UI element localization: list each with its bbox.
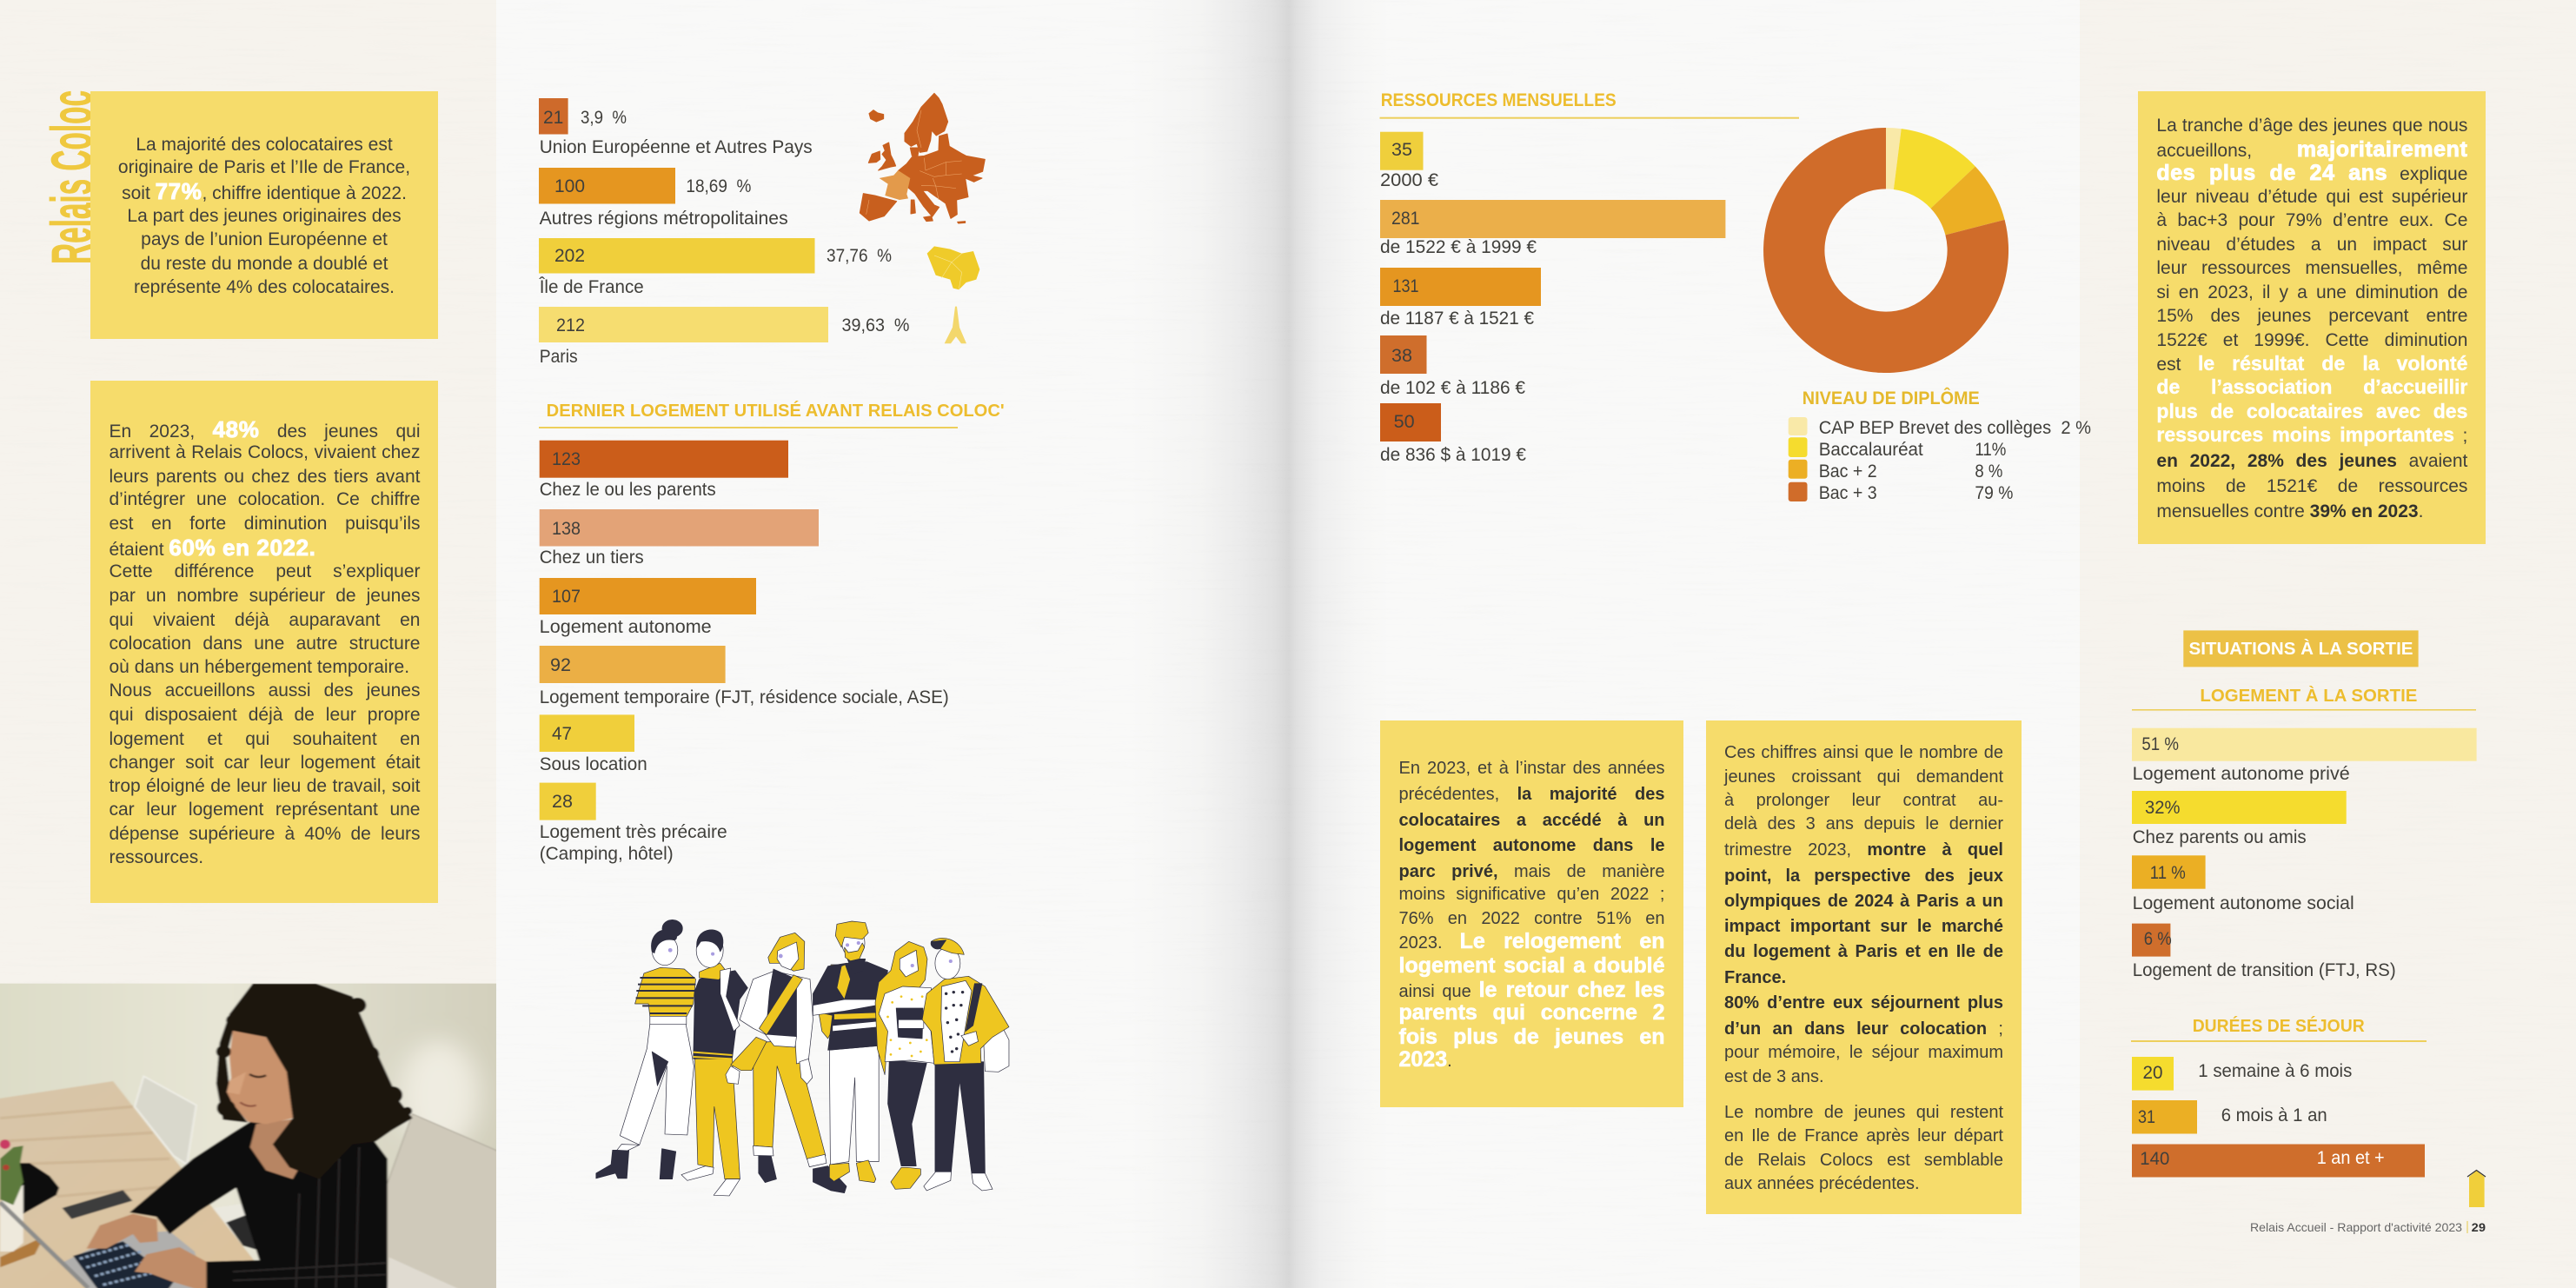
text box: logement avant l'arrivée: par un nombre supérieur de jeunes	[110, 586, 421, 606]
bar: 1 semaine à 6 mois: 20	[2143, 1063, 2162, 1083]
text box: origine des colocataires: soit 77%, chiffre identique à 2022.	[122, 178, 407, 204]
bar: logement autonome: Logement autonome	[540, 617, 712, 637]
text box: logement avant l'arrivée: est en forte diminution puisqu’ils	[110, 514, 421, 534]
badge: situations à la sortie: SITUATIONS À LA SORTIE	[2188, 639, 2413, 659]
chart: dernier logement	[540, 441, 949, 864]
legend: niveau de diplôme	[1789, 417, 2091, 503]
text box: prolongation et jeux olympiques: jeunes croissant qui demandent	[1724, 767, 2003, 787]
text box: âge, études et ressources: des plus de 24 ans explique	[2156, 161, 2467, 185]
bar: logement temporaire	[540, 646, 949, 707]
legend: niveau de diplôme: 8 %	[1975, 461, 2002, 481]
text box: accès au logement autonome: fois plus de jeunes en	[1399, 1025, 1665, 1049]
text box: origine des colocataires: du reste du monde a doublé et	[141, 254, 388, 274]
text box: logement avant l'arrivée: arrivent à Relais Colocs, vivaient chez	[110, 442, 421, 462]
heading: durées de séjour: DURÉES DE SÉJOUR	[2193, 1016, 2365, 1036]
text box: accès au logement autonome: En 2023, et à l’instar des années	[1399, 759, 1665, 778]
bar: tiers	[540, 509, 819, 568]
person 4	[813, 921, 888, 1183]
text box: logement avant l'arrivée: Cette différence peut s’expliquer	[110, 561, 421, 581]
bar: 836 à 1019: de 836 $ à 1019 €	[1380, 445, 1526, 465]
text box: logement avant l'arrivée: changer soit car leur logement était	[110, 753, 421, 773]
text box: âge, études et ressources: à bac+3 pour 79% d’entre eux. Ce	[2156, 210, 2467, 230]
segment: CAP BEP 2%	[1886, 128, 1902, 189]
text box: âge, études et ressources: leur niveau d’étude qui est supérieur	[2156, 187, 2467, 207]
bar: Union Européenne: 21	[543, 108, 563, 128]
bar: logement autonome social: 11 %	[2150, 863, 2186, 883]
bar: tiers: 138	[552, 519, 581, 539]
bar: logement de transition	[2132, 924, 2396, 980]
icon: map of Europe	[860, 93, 985, 223]
bar: 1 an et plus: 140	[2140, 1149, 2169, 1169]
badge: situations à la sortie	[2183, 630, 2419, 667]
heading: dernier logement: DERNIER LOGEMENT UTILISÉ AVANT RELAIS COLOC'	[547, 401, 1005, 421]
text box: logement avant l'arrivée: qui vivaient déjà auparavant en	[110, 610, 421, 630]
text box: logement avant l'arrivée: En 2023, 48% des jeunes qui	[110, 416, 421, 442]
bar: 1 an et plus	[2132, 1144, 2425, 1177]
text box: prolongation et jeux olympiques: de Relais Colocs est semblable	[1724, 1151, 2003, 1170]
text box: âge, études et ressources: accueillons, majoritairement	[2156, 137, 2467, 162]
bar: logement temporaire: Logement temporaire (FJT, résidence sociale, ASE)	[540, 687, 949, 707]
text box: logement avant l'arrivée	[90, 381, 438, 903]
bar: logement autonome privé	[2132, 728, 2477, 784]
text box: prolongation et jeux olympiques: delà des 3 ans depuis le dernier	[1724, 814, 2003, 833]
text box: logement avant l'arrivée: Nous accueillons aussi des jeunes	[110, 681, 421, 700]
text box: logement avant l'arrivée: colocation dans une autre structure	[110, 634, 421, 654]
text box: origine des colocataires: originaire de Paris et l’Ile de France,	[118, 157, 410, 177]
bar: Île de France: 37,76 %	[827, 246, 892, 266]
text box: prolongation et jeux olympiques: point, la perspective des jeux	[1724, 866, 2003, 885]
bar: chez parents ou amis: Chez parents ou amis	[2133, 827, 2307, 847]
bar: 1187 à 1521	[1380, 268, 1541, 329]
segment: Bac + 3 79%	[1763, 128, 2008, 373]
heading: logement à la sortie: LOGEMENT À LA SORTIE	[2200, 686, 2417, 706]
bar: parents	[540, 441, 788, 500]
bar: 1522 à 1999: 281	[1391, 209, 1420, 229]
text box: accès au logement autonome: 2023.	[1399, 1047, 1452, 1072]
text box: logement avant l'arrivée: où dans un hébergement temporaire.	[110, 657, 409, 677]
bar: Île de France: 202	[554, 246, 585, 266]
text box: prolongation et jeux olympiques: en Ile de France après leur départ	[1724, 1126, 2003, 1145]
bar: logement temporaire: 92	[550, 655, 571, 675]
text box: prolongation et jeux olympiques: à prolonger leur contrat au-	[1724, 791, 2003, 810]
photo: young woman typing on a laptop	[0, 979, 506, 1288]
bar: Union Européenne: 3,9 %	[581, 108, 627, 128]
bar: Paris: Paris	[540, 347, 578, 367]
legend: niveau de diplôme: Bac + 3	[1819, 483, 1877, 503]
text box: logement avant l'arrivée: ressources.	[110, 847, 203, 867]
text box: accès au logement autonome	[1380, 720, 1683, 1107]
legend: niveau de diplôme: CAP BEP Brevet des collèges 2 %	[1819, 418, 2091, 438]
bar: 6 mois à 1 an: 31	[2138, 1107, 2155, 1127]
text box: accès au logement autonome: logement social a doublé	[1399, 953, 1665, 978]
person 2	[681, 930, 747, 1196]
bar: sous location: 47	[552, 724, 572, 744]
text box: prolongation et jeux olympiques: pour mémoire, le séjour maximum	[1724, 1043, 2003, 1062]
text box: accès au logement autonome: colocataires a accédé à un	[1399, 810, 1665, 829]
text box: âge, études et ressources: mensuelles contre 39% en 2023.	[2156, 501, 2423, 521]
bar: chez parents ou amis	[2132, 791, 2347, 847]
bar: 102 à 1186: de 102 € à 1186 €	[1380, 378, 1525, 398]
text box: logement avant l'arrivée: dépense supérieure à 40% de leurs	[110, 824, 421, 844]
bar: 102 à 1186	[1380, 335, 1525, 398]
legend: niveau de diplôme: Bac + 2	[1819, 461, 1877, 481]
legend: niveau de diplôme: 79 %	[1975, 483, 2013, 503]
bar: 6 mois à 1 an: 6 mois à 1 an	[2221, 1105, 2327, 1125]
text box: âge, études et ressources: ressources moins importantes ;	[2156, 423, 2467, 446]
text box: origine des colocataires: pays de l’union Européenne et	[141, 229, 388, 249]
segment: Baccalauréat 11%	[1894, 129, 1975, 209]
text box: âge, études et ressources: est le résultat de la volonté	[2156, 352, 2467, 375]
icon: back to top arrow	[2467, 1170, 2486, 1207]
text box: âge, études et ressources: La tranche d’âge des jeunes que nous	[2156, 116, 2467, 136]
bar: Paris: 39,63 %	[841, 315, 909, 335]
text box: origine des colocataires	[90, 91, 438, 339]
bar: logement très précaire: 28	[552, 792, 573, 812]
segment: Bac + 2 8%	[1931, 167, 2005, 235]
bar: logement très précaire	[540, 783, 727, 864]
bar: logement très précaire: Logement très précaire	[540, 822, 727, 842]
text box: accès au logement autonome: logement autonome dans le	[1399, 836, 1665, 855]
text box: prolongation et jeux olympiques: France.	[1724, 968, 1786, 987]
chart: logement à la sortie	[2132, 728, 2477, 980]
bar: 1522 à 1999: de 1522 € à 1999 €	[1380, 237, 1537, 257]
heading: niveau de diplôme: NIVEAU DE DIPLÔME	[1803, 388, 1980, 408]
text box: accès au logement autonome: 76% en 2022 contre 51% en	[1399, 909, 1665, 928]
bar: 102 à 1186: 38	[1391, 346, 1412, 366]
bar: 1187 à 1521: de 1187 € à 1521 €	[1380, 309, 1534, 329]
bar: logement autonome: 107	[552, 587, 581, 607]
person 1	[596, 920, 695, 1179]
bar: Île de France	[539, 238, 892, 297]
bar: sous location	[540, 714, 647, 774]
bar: 2000 euros: 35	[1391, 140, 1412, 160]
bar: logement autonome social	[2132, 855, 2354, 913]
bar: logement autonome privé: Logement autonome privé	[2133, 764, 2350, 784]
bar: parents: 123	[552, 449, 581, 469]
bar: chez parents ou amis: 32%	[2145, 798, 2180, 818]
bar: 1 semaine à 6 mois	[2132, 1057, 2352, 1091]
bar: logement de transition: Logement de transition (FTJ, RS)	[2133, 960, 2396, 980]
text box: âge, études et ressources: de l’association d’accueillir	[2156, 375, 2467, 398]
icon: Île-de-France map	[927, 246, 979, 289]
bar: tiers: Chez un tiers	[540, 548, 644, 568]
text box: origine des colocataires: La part des jeunes originaires des	[127, 206, 402, 226]
text box: âge, études et ressources: en 2022, 28% des jeunes avaient	[2156, 451, 2467, 471]
bar: 836 à 1019	[1380, 403, 1526, 465]
bar: logement très précaire: (Camping, hôtel)	[540, 844, 674, 864]
bar: Union Européenne	[539, 98, 813, 157]
bar: 2000 euros	[1380, 132, 1438, 190]
text box: prolongation et jeux olympiques: du logement à Paris et en Ile de	[1724, 942, 2003, 961]
text box: logement avant l'arrivée: qui disposaient déjà de leur propre	[110, 705, 421, 725]
icon: Eiffel tower	[945, 307, 966, 343]
bar: 2000 euros: 2000 €	[1380, 170, 1438, 190]
text box: prolongation et jeux olympiques: d’un an dans leur colocation ;	[1724, 1019, 2003, 1039]
bar: 1187 à 1521: 131	[1392, 276, 1418, 296]
bar: logement autonome privé: 51 %	[2141, 734, 2179, 754]
text box: prolongation et jeux olympiques: impact important sur le marché	[1724, 917, 2003, 936]
person 5	[875, 941, 934, 1189]
legend: niveau de diplôme: 11%	[1975, 440, 2006, 460]
text box: prolongation et jeux olympiques: aux années précédentes.	[1724, 1174, 1920, 1193]
text box: accès au logement autonome: 2023. Le relogement en	[1399, 929, 1665, 953]
text box: accès au logement autonome: précédentes, la majorité des	[1399, 785, 1665, 804]
text box: accès au logement autonome: parc privé, mais de manière	[1399, 862, 1665, 881]
text box: accès au logement autonome: ainsi que le retour chez les	[1399, 978, 1665, 1002]
text box: âge, études et ressources: leur ressources mensuelles, même	[2156, 258, 2467, 278]
bar: Union Européenne: Union Européenne et Autres Pays	[540, 137, 813, 157]
illustration: group of six young people	[596, 920, 1009, 1196]
text box: logement avant l'arrivée: logement et qui souhaitent en	[110, 729, 421, 749]
text box: prolongation et jeux olympiques: trimestre 2023, montre à quel	[1724, 840, 2003, 860]
bar: parents: Chez le ou les parents	[540, 480, 716, 500]
text box: âge, études et ressources: 1522€ et 1999€. Cette diminution	[2156, 330, 2467, 350]
heading: ressources mensuelles: RESSOURCES MENSUELLES	[1381, 90, 1617, 110]
bar: Autres régions: 100	[554, 176, 585, 196]
text box: âge, études et ressources: plus de colocataires avec des	[2156, 400, 2467, 422]
donut chart: niveau de diplôme	[1763, 128, 2008, 373]
bar: logement de transition: 6 %	[2144, 929, 2172, 949]
text box: prolongation et jeux olympiques	[1705, 720, 2022, 1213]
text box: prolongation et jeux olympiques: 80% d’entre eux séjournent plus	[1724, 993, 2003, 1012]
bar: Paris	[539, 307, 909, 367]
text box: logement avant l'arrivée: leurs parents ou chez des tiers avant	[110, 466, 421, 487]
bar: sous location: Sous location	[540, 754, 647, 774]
text box: logement avant l'arrivée: trop éloigné de leur lieu de travail, soit	[110, 776, 421, 796]
bar: logement autonome	[540, 578, 756, 637]
text box: âge, études et ressources: 15% des jeunes percevant entre	[2156, 306, 2467, 326]
text box: âge, études et ressources: moins de 1521€ de ressources	[2156, 476, 2467, 496]
text box: logement avant l'arrivée: étaient 60% en 2022.	[110, 534, 315, 561]
legend: niveau de diplôme: Baccalauréat	[1819, 440, 1923, 460]
bar: Autres régions: Autres régions métropolitaines	[540, 209, 788, 229]
text box: logement avant l'arrivée: car leur logement représentant une	[110, 800, 421, 820]
chart: origine des colocataires	[539, 98, 909, 367]
person 6	[922, 938, 1009, 1191]
text box: prolongation et jeux olympiques: Ces chiffres ainsi que le nombre de	[1724, 743, 2003, 762]
text box: origine des colocataires: La majorité des colocataires est	[136, 134, 393, 155]
text box: prolongation et jeux olympiques: est de 3 ans.	[1724, 1067, 1824, 1086]
text box: prolongation et jeux olympiques: Le nombre de jeunes qui restent	[1724, 1103, 2003, 1122]
bar: 1 semaine à 6 mois: 1 semaine à 6 mois	[2198, 1061, 2352, 1081]
footer: report title and page number: 29	[2472, 1220, 2486, 1234]
text box: âge, études et ressources: si en 2023, il y a une diminution de	[2156, 282, 2467, 302]
text box: accès au logement autonome: parents qui concerne 2	[1399, 1000, 1665, 1025]
bar: 1522 à 1999	[1380, 200, 1725, 257]
bar: Autres régions	[539, 168, 788, 229]
person 3	[726, 933, 846, 1193]
bar: logement autonome social: Logement autonome social	[2133, 893, 2354, 913]
text box: logement avant l'arrivée: d’intégrer une colocation. Ce chiffre	[110, 489, 421, 509]
text box: prolongation et jeux olympiques: olympiques de 2024 à Paris a un	[1724, 892, 2003, 911]
text box: âge, études et ressources	[2138, 91, 2486, 544]
bar: 6 mois à 1 an	[2132, 1100, 2327, 1133]
text box: accès au logement autonome: moins significative qu’en 2022 ;	[1399, 885, 1665, 904]
bar: 1 an et plus: 1 an et +	[2317, 1148, 2385, 1168]
bar: Île de France: Île de France	[539, 277, 644, 297]
chart: ressources mensuelles	[1380, 132, 1725, 465]
bar: 836 à 1019: 50	[1394, 412, 1415, 432]
chart: durées de séjour	[2132, 1057, 2425, 1177]
bar: Autres régions: 18,69 %	[686, 176, 751, 196]
footer: report title and page number: Relais Accueil - Rapport d'activité 2023	[2250, 1220, 2462, 1234]
bar: Paris: 212	[556, 315, 585, 335]
text box: âge, études et ressources: niveau d’études a un impact sur	[2156, 235, 2467, 255]
text box: origine des colocataires: représente 4% des colocataires.	[134, 277, 395, 297]
